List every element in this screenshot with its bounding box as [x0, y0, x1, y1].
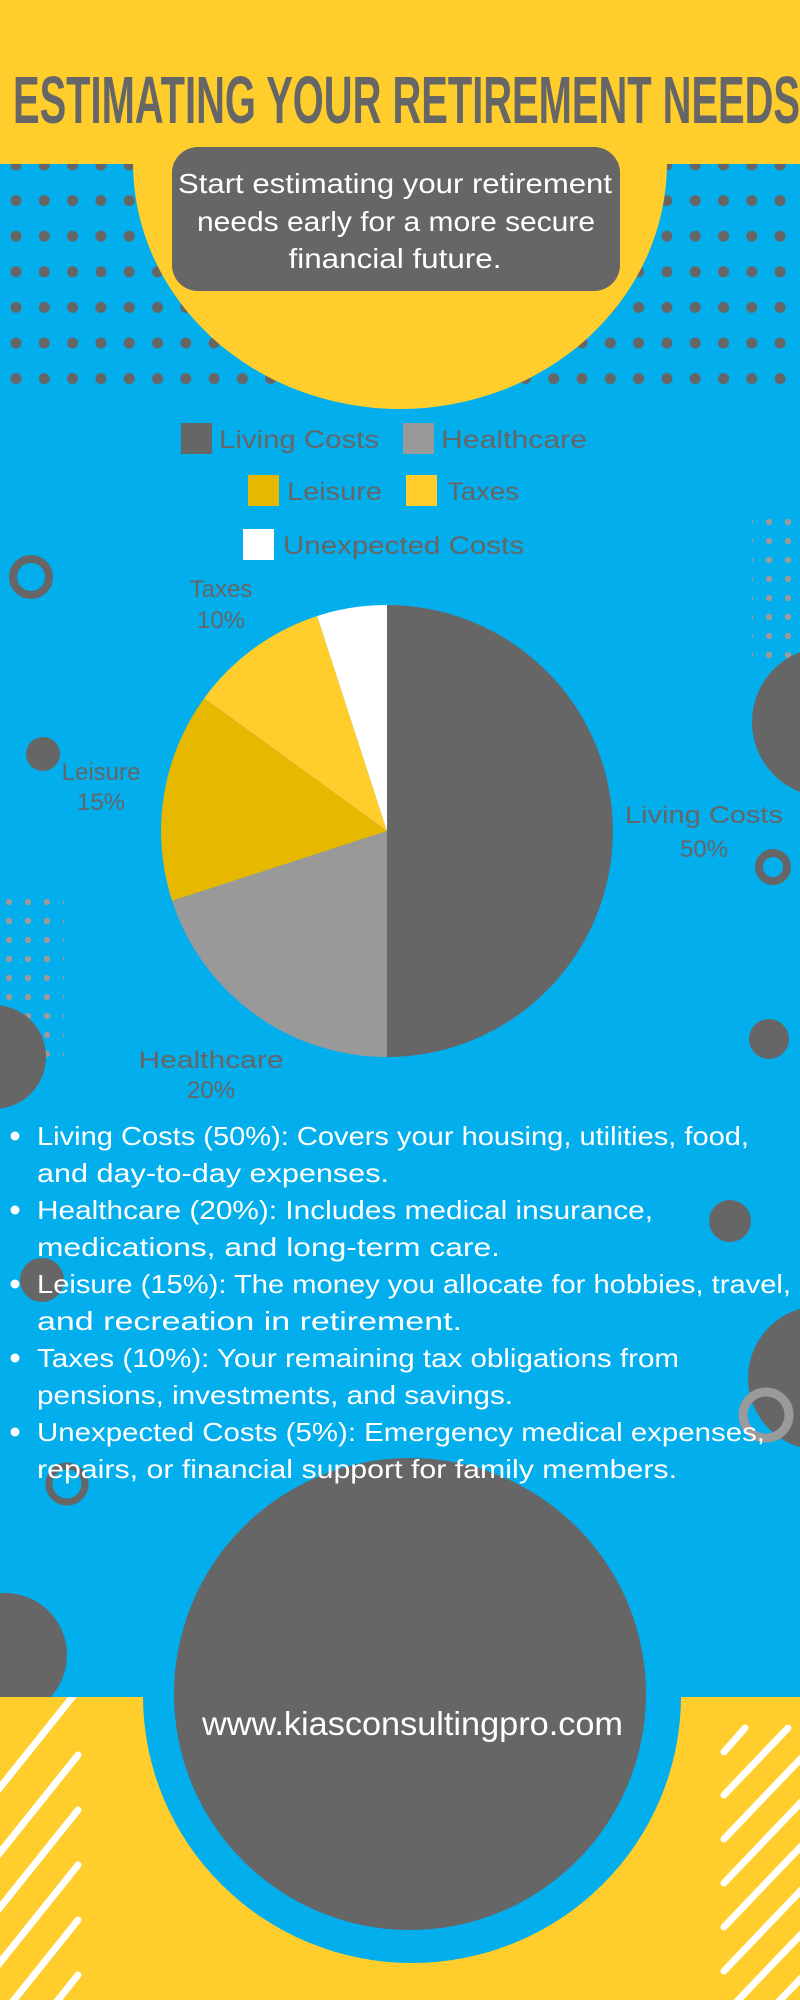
legend: Leisure	[287, 478, 382, 506]
bullet list: medications, and long-term care.	[37, 1232, 500, 1262]
header semicircle	[133, 0, 667, 409]
pie labels: Healthcare	[138, 1047, 284, 1074]
bullet list	[10, 1121, 791, 1484]
bullet list: and recreation in retirement.	[37, 1306, 462, 1336]
pie labels: 20%	[187, 1077, 235, 1104]
pie labels: 10%	[197, 607, 245, 634]
pie labels: Leisure	[62, 759, 140, 786]
pie labels: 15%	[77, 789, 125, 816]
bullet list: Taxes (10%): Your remaining tax obligations from	[37, 1343, 679, 1373]
small dot grid right	[752, 518, 800, 668]
bullet list: repairs, or financial support for family members.	[37, 1454, 677, 1484]
subtitle box: Start estimating your retirement	[178, 168, 612, 199]
bullet list: Unexpected Costs (5%): Emergency medical expenses,	[37, 1417, 765, 1447]
legend: Unexpected Costs	[283, 532, 524, 560]
bullet list: and day-to-day expenses.	[37, 1158, 389, 1188]
subtitle box: needs early for a more secure	[197, 206, 595, 237]
stripes right	[724, 1728, 800, 2000]
bullet list: Living Costs (50%): Covers your housing, utilities, food,	[37, 1121, 749, 1151]
pie chart	[161, 605, 613, 1057]
legend: Healthcare	[441, 426, 587, 454]
subtitle box	[172, 147, 620, 291]
dot pattern background	[0, 150, 800, 395]
footer band	[0, 1697, 800, 2000]
pie labels: Taxes	[190, 576, 252, 603]
footer gray circle with URL	[174, 1458, 646, 1930]
bullet list: pensions, investments, and savings.	[37, 1380, 513, 1410]
subtitle box: financial future.	[288, 243, 502, 274]
stripes left	[0, 1690, 78, 2000]
legend: Taxes	[447, 478, 519, 506]
legend	[181, 423, 587, 560]
pie labels: 50%	[680, 836, 728, 863]
decorative circles	[0, 559, 800, 1717]
footer blue ring	[143, 1429, 681, 1963]
bullet list: Healthcare (20%): Includes medical insurance,	[37, 1195, 653, 1225]
pie labels	[62, 576, 783, 1104]
footer gray circle with URL: www.kiasconsultingpro.com	[201, 1705, 623, 1742]
bullet list: Leisure (15%): The money you allocate for hobbies, travel,	[37, 1269, 791, 1299]
pie labels: Living Costs	[625, 802, 783, 829]
legend: Living Costs	[219, 426, 379, 454]
small dot grid left	[0, 893, 64, 1063]
header band	[0, 0, 800, 164]
